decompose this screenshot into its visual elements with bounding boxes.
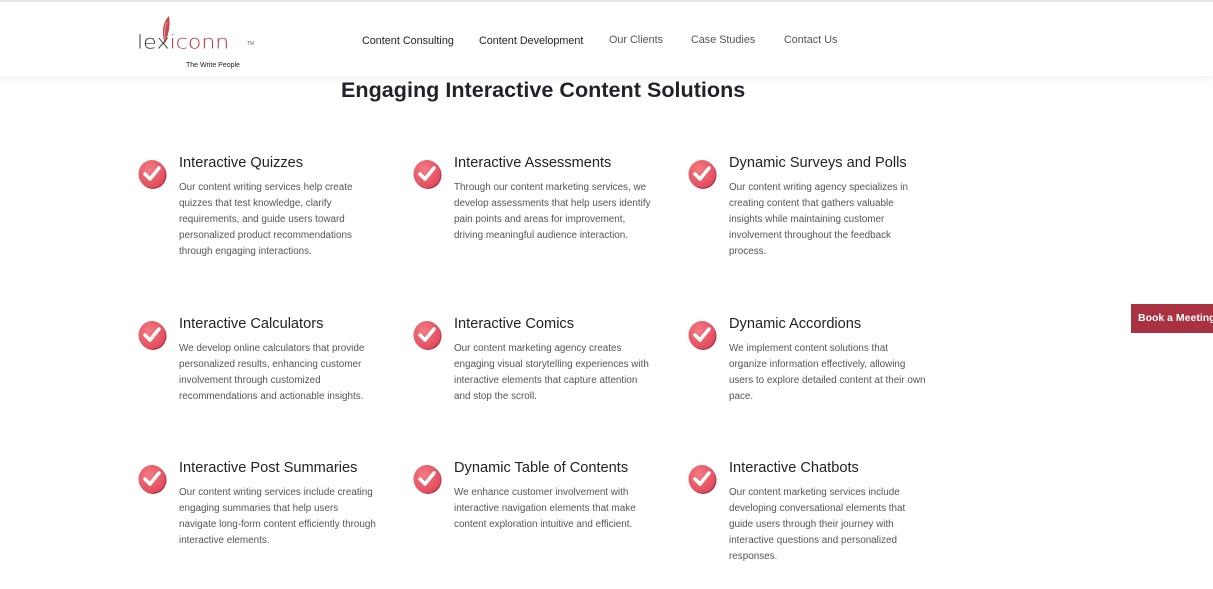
card: Dynamic Accordions: pace. [729,391,753,402]
card: Dynamic Table of Contents: Dynamic Table of Contents [454,460,628,476]
card: Interactive Quizzes: quizzes that test knowledge, clarify [179,198,332,209]
header bar: Case Studies [691,34,755,46]
title: Engaging Interactive Content Solutions [341,77,745,102]
card: Interactive Chatbots: Interactive Chatbots [729,460,859,476]
card: Interactive Post Summaries: engaging summaries that help users [179,503,338,514]
header bar: Our Clients [609,34,663,46]
card: Interactive Quizzes: Interactive Quizzes [179,155,303,171]
card: Dynamic Surveys and Polls: involvement throughout the feedback [729,230,891,241]
nav links: Content Consulting [362,35,454,47]
card: Interactive Assessments: Through our content marketing services, we [454,182,646,193]
logo: The Write People [186,62,240,69]
card: Dynamic Surveys and Polls: process. [729,246,766,257]
card: Dynamic Accordions: organize information effectively, allowing [729,359,905,370]
card: Interactive Quizzes: requirements, and guide users toward [179,214,345,225]
card: Dynamic Table of Contents: interactive navigation elements that make [454,503,636,514]
card: Interactive Post Summaries: navigate long-form content efficiently through [179,519,376,530]
icon: check [414,465,442,494]
card: Dynamic Surveys and Polls: Dynamic Surveys and Polls [729,155,907,171]
header bar: Content Development [479,35,583,47]
header bar: Contact Us [784,34,837,46]
card: Dynamic Accordions: Dynamic Accordions [729,316,861,332]
card: Interactive Chatbots: guide users through their journey with [729,519,894,530]
card: Interactive Calculators: personalized results, enhancing customer [179,359,361,370]
card: Dynamic Table of Contents: content exploration intuitive and efficient. [454,519,632,530]
icon: check [138,465,166,494]
card: Interactive Quizzes: through engaging interactions. [179,246,312,257]
card: Interactive Calculators: Interactive Calculators [179,316,323,332]
card: Interactive Quizzes: Our content writing services help create [179,182,352,193]
card: Dynamic Table of Contents [414,460,636,530]
icon: check [688,321,716,350]
card: Dynamic Accordions: We implement content solutions that [729,343,888,354]
card: Dynamic Accordions: users to explore detailed content at their own [729,375,926,386]
logo: TM [247,41,254,47]
card: Interactive Comics: interactive elements that capture attention [454,375,637,386]
card: Interactive Comics: engaging visual storytelling experiences with [454,359,649,370]
card: Interactive Assessments [414,155,651,241]
icon: check [414,321,442,350]
card: Interactive Quizzes [138,155,352,257]
card: Interactive Calculators [138,316,364,402]
card: Dynamic Surveys and Polls: Our content writing agency specializes in [729,182,908,193]
card: Dynamic Surveys and Polls [688,155,908,257]
icon: check [688,160,716,189]
icon: check [688,465,716,494]
logo: lexiconn [137,31,229,53]
card: Interactive Quizzes: personalized product recommendations [179,230,352,241]
card: Interactive Assessments: pain points and areas for improvement, [454,214,625,225]
card: Interactive Comics: Our content marketing agency creates [454,343,621,354]
card: Interactive Chatbots: interactive questions and personalized [729,535,897,546]
card: Dynamic Surveys and Polls: creating content that gathers valuable [729,198,894,209]
card: Interactive Assessments: driving meaningful audience interaction. [454,230,628,241]
card: Interactive Post Summaries: Interactive Post Summaries [179,460,357,476]
card: Interactive Calculators: involvement through customized [179,375,321,386]
logo [137,16,254,69]
card: Interactive Calculators: We develop online calculators that provide [179,343,364,354]
card: Dynamic Accordions [688,316,926,402]
card: Interactive Comics: and stop the scroll. [454,391,537,402]
card: Dynamic Table of Contents: We enhance customer involvement with [454,487,628,498]
card: Interactive Chatbots: responses. [729,551,777,562]
card: Interactive Comics [414,316,649,402]
card: Interactive Calculators: recommendations and actionable insights. [179,391,363,402]
icon: check [414,160,442,189]
icon: check [138,321,166,350]
header bar [0,0,1213,76]
card: Interactive Post Summaries: Our content writing services include creating [179,487,373,498]
card: Dynamic Surveys and Polls: insights while maintaining customer [729,214,884,225]
card: Interactive Post Summaries [138,460,376,546]
card: Interactive Assessments: develop assessments that help users identify [454,198,651,209]
card: Interactive Comics: Interactive Comics [454,316,574,332]
card: Interactive Chatbots: developing conversational elements that [729,503,905,514]
card: Interactive Post Summaries: interactive elements. [179,535,270,546]
icon: check [138,160,166,189]
card: Interactive Chatbots: Our content marketing services include [729,487,900,498]
card: Interactive Assessments: Interactive Assessments [454,155,611,171]
button: Book a Meeting [1131,304,1213,333]
card: Interactive Chatbots [688,460,906,562]
